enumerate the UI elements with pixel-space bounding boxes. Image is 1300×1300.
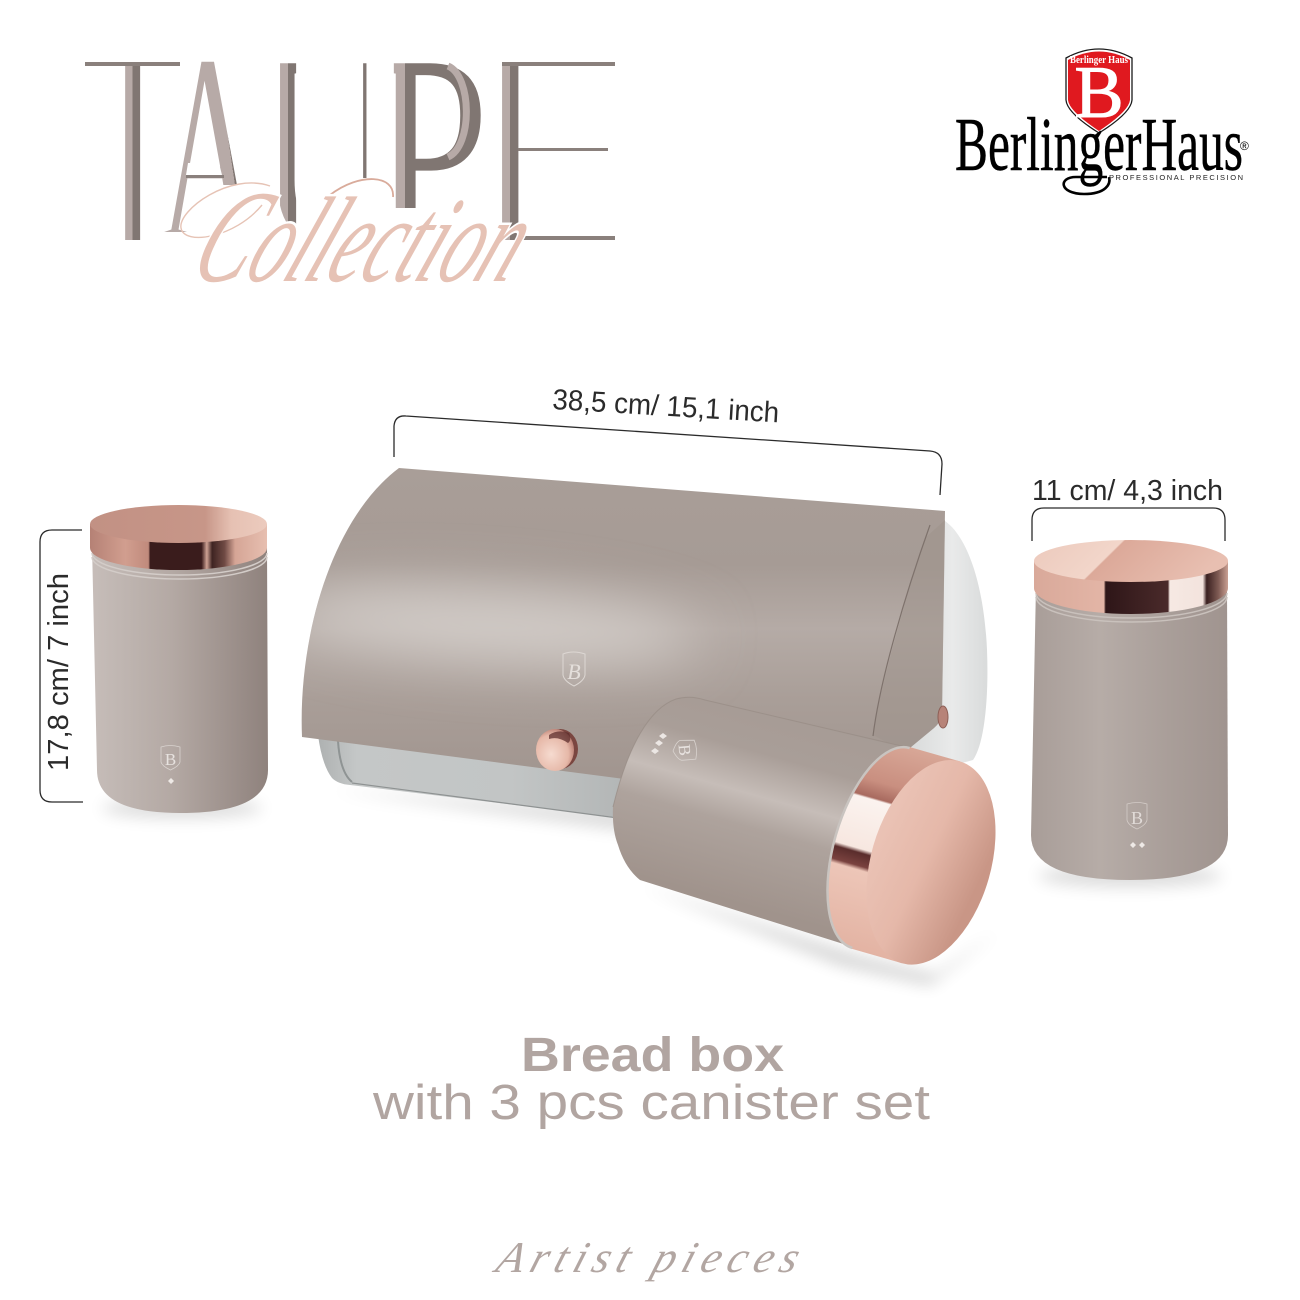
knob	[536, 729, 578, 771]
seam	[873, 525, 930, 736]
right side panel	[873, 520, 945, 752]
body	[613, 697, 910, 947]
lid top	[1034, 540, 1228, 582]
product: left canister	[90, 505, 268, 818]
dome highlight	[278, 576, 702, 674]
body	[1031, 585, 1228, 880]
shield red	[1068, 52, 1130, 131]
side rivet	[938, 706, 948, 728]
thin letter bars	[85, 62, 615, 240]
soft shadow	[102, 798, 262, 818]
bracket	[1032, 508, 1225, 541]
g descender loop	[1064, 177, 1109, 194]
dome	[302, 468, 945, 790]
tagline: PROFESSIONAL PRECISION	[1109, 173, 1243, 182]
title: Taupe Collection	[85, 62, 615, 282]
lid top	[90, 505, 267, 543]
logo mark	[563, 652, 585, 686]
logo mark	[1127, 802, 1147, 829]
body ring	[807, 735, 910, 948]
signature: Artist pieces: Artist pieces	[488, 1233, 807, 1282]
logo mark: B	[1131, 808, 1143, 828]
back white body	[900, 518, 987, 780]
base rim	[338, 741, 352, 782]
diamond mark	[168, 778, 174, 784]
soft shadow	[1038, 865, 1222, 887]
logo mark: B	[567, 659, 581, 684]
logo mark: B	[165, 750, 176, 769]
title letters TAUPE	[125, 62, 518, 240]
title letters TAUPE: U	[259, 0, 389, 299]
rim lines	[1036, 593, 1227, 618]
dimension: width of bread box	[394, 384, 942, 495]
lid band	[90, 524, 267, 570]
title script word Collection: Collection	[173, 164, 560, 310]
logo mark: B	[675, 744, 694, 757]
upper body edge	[613, 697, 910, 807]
logo mark	[161, 746, 180, 770]
diamond marks	[651, 733, 667, 754]
rim lines	[92, 553, 267, 575]
lid face	[844, 745, 1018, 980]
swash loops of the script word	[181, 179, 393, 237]
body	[92, 545, 268, 813]
product title	[372, 1029, 930, 1130]
diamond marks	[1130, 842, 1145, 848]
A crossbar	[186, 175, 224, 178]
logo: Berlinger Haus	[955, 49, 1249, 194]
product: lying canister	[613, 697, 1018, 985]
heading: Bread box: Bread box	[521, 1029, 784, 1082]
title letters TAUPE: E	[481, 0, 593, 298]
subheading: with 3 pcs canister set	[372, 1076, 930, 1130]
product: bread box	[278, 468, 987, 830]
silver base	[318, 735, 640, 820]
A crossbar thinning	[186, 163, 222, 175]
shield motto: Berlinger Haus	[1070, 54, 1129, 66]
product: right canister	[1031, 540, 1228, 887]
title letters TAUPE: P	[372, 0, 489, 299]
lid band	[807, 734, 960, 963]
shield outline	[1066, 49, 1132, 133]
bracket	[40, 530, 83, 802]
shield letter B: B	[1074, 52, 1124, 134]
registered mark: ®	[1240, 139, 1249, 153]
logo mark	[672, 739, 697, 761]
P bowl inner shade	[448, 66, 466, 157]
title letters TAUPE: T	[76, 0, 188, 298]
soft shadow	[330, 770, 960, 830]
dimension label: 17,8 cm/ 7 inch	[43, 573, 75, 771]
dimension label: 38,5 cm/ 15,1 inch	[552, 384, 780, 429]
bracket	[394, 416, 942, 495]
soft shadow	[640, 885, 1000, 985]
lid band	[1034, 561, 1228, 614]
dimension: canister height	[40, 530, 83, 802]
dimension: canister diameter	[1032, 475, 1225, 541]
dimension label: 11 cm/ 4,3 inch	[1032, 475, 1223, 507]
title letters TAUPE: A	[160, 1, 257, 299]
